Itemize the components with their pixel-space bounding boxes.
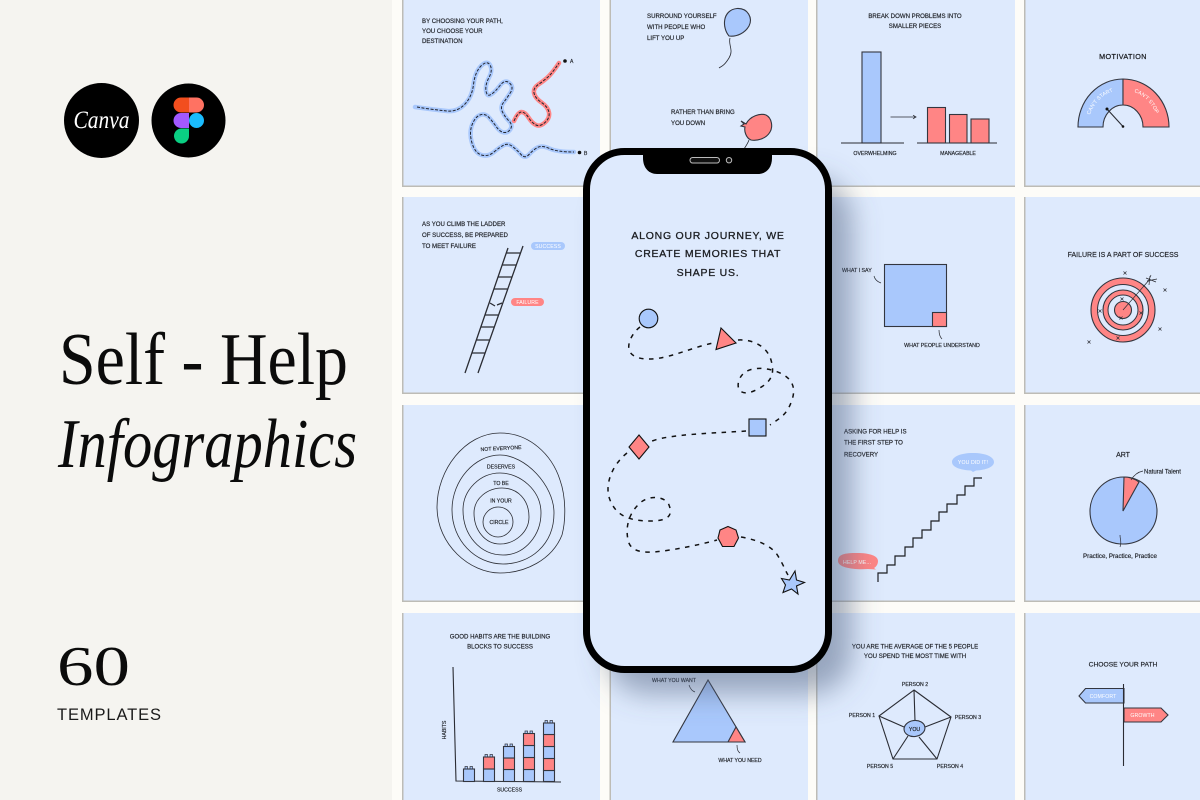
text: choose title: CHOOSE YOUR PATH xyxy=(1089,662,1158,668)
chart: winding path xyxy=(415,59,588,157)
chart: pie chart xyxy=(1090,471,1157,547)
icon: Figma badge xyxy=(152,84,226,158)
icon: circle marker xyxy=(639,309,658,328)
heading: phone title: ALONG OUR JOURNEY, WE xyxy=(631,230,785,242)
chart: pentagon network: PERSON 2 xyxy=(902,682,928,688)
chart: pentagon network: PERSON 3 xyxy=(955,715,981,721)
chart: target with arrow xyxy=(1088,272,1166,344)
panel: card what I say xyxy=(816,197,1015,394)
callout: help me bubble xyxy=(838,553,878,570)
heading: phone title: CREATE MEMORIES THAT xyxy=(635,248,781,260)
text: help caption: THE FIRST STEP TO xyxy=(844,440,903,446)
callout: you did it bubble: YOU DID IT! xyxy=(958,460,988,466)
text: path caption: YOU CHOOSE YOUR xyxy=(422,28,483,35)
heading: main title xyxy=(57,319,357,483)
text: templates label: TEMPLATES xyxy=(57,706,161,724)
chart: pentagon network: PERSON 1 xyxy=(849,713,875,719)
icon: square marker xyxy=(749,419,766,436)
chart: pentagon network: YOU xyxy=(909,727,920,733)
panel: card asking for help xyxy=(816,405,1015,602)
callout: failure pill xyxy=(511,298,544,306)
icon: star marker xyxy=(782,571,804,594)
chart: nested circles: TO BE xyxy=(493,481,509,487)
panel: phone mockup xyxy=(586,152,828,670)
panel: left title column xyxy=(0,0,392,800)
text: template count: 60 xyxy=(57,636,130,698)
text: what you want label: WHAT YOU WANT xyxy=(652,678,697,684)
chart: nested circles: NOT EVERYONE xyxy=(480,445,522,453)
icon: phone notch xyxy=(643,153,772,174)
panel: card failure target xyxy=(1024,197,1200,394)
panel: card average of five xyxy=(816,613,1015,800)
text: ladder caption: TO MEET FAILURE xyxy=(422,243,476,250)
chart: nested circles: DESERVES xyxy=(487,464,516,470)
chart: pentagon network: PERSON 4 xyxy=(937,764,963,770)
panel: card want vs need xyxy=(610,613,808,800)
text: break down title xyxy=(868,13,962,30)
chart: stacked blocks xyxy=(442,667,561,794)
heading: main title: Infographics xyxy=(57,406,357,483)
text: break down title: SMALLER PIECES xyxy=(889,23,941,30)
icon: heptagon marker xyxy=(718,526,738,546)
text: help caption: ASKING FOR HELP IS xyxy=(844,428,907,436)
heading: phone title xyxy=(631,230,785,279)
panel: card circle rings xyxy=(402,405,600,602)
text: ladder caption: AS YOU CLIMB THE LADDER xyxy=(422,221,506,228)
chart: triangle want vs need xyxy=(673,680,745,753)
chart: pentagon network: PERSON 5 xyxy=(867,764,893,770)
text: help caption xyxy=(844,428,907,458)
chart: pentagon network xyxy=(849,682,981,770)
chart: nested circles: IN YOUR xyxy=(490,498,512,504)
text: motivation title: MOTIVATION xyxy=(1099,52,1147,61)
text: balloon caption top xyxy=(647,13,717,42)
panel: card path xyxy=(402,0,600,187)
chart: bars overwhelming vs manageable: OVERWHELMING xyxy=(853,151,897,157)
icon: Canva badge: Canva xyxy=(74,107,130,134)
text: practice label: Practice, Practice, Practice xyxy=(1083,553,1158,560)
panel: card balloons xyxy=(610,0,808,187)
icon: signpost xyxy=(1079,684,1168,766)
panel: card good habits xyxy=(402,613,600,800)
chart: winding path: A xyxy=(570,59,574,65)
chart: stacked blocks: HABITS xyxy=(442,720,448,739)
callout: success pill xyxy=(531,242,565,250)
panel: card choose your path xyxy=(1024,613,1200,800)
text: balloon caption top: SURROUND YOURSELF xyxy=(647,13,717,20)
chart: winding path: B xyxy=(584,151,588,157)
icon: blue balloon xyxy=(719,8,750,68)
callout: help me bubble: HELP ME... xyxy=(843,560,871,566)
icon: signpost: COMFORT xyxy=(1090,694,1117,700)
icon: Canva badge xyxy=(64,83,139,158)
chart: nested circles xyxy=(437,433,565,573)
icon: ladder xyxy=(465,246,523,373)
text: balloon caption top: WITH PEOPLE WHO xyxy=(647,24,705,31)
panel: card motivation xyxy=(1024,0,1200,187)
icon: diamond marker xyxy=(629,435,649,459)
text: average title: YOU ARE THE AVERAGE OF THE 5 PEOPLE xyxy=(852,644,978,650)
text: what I say label: WHAT I SAY xyxy=(842,268,872,274)
icon: signpost: GROWTH xyxy=(1130,713,1155,719)
callout: success pill: SUCCESS xyxy=(535,244,561,250)
icon: red balloon xyxy=(741,114,772,149)
chart: nested circles: CIRCLE xyxy=(489,520,509,526)
text: average title: YOU SPEND THE MOST TIME WITH xyxy=(864,653,966,660)
text: balloon caption bottom: YOU DOWN xyxy=(671,120,705,127)
text: habits title: BLOCKS TO SUCCESS xyxy=(467,644,533,650)
text: habits title xyxy=(450,634,550,650)
text: path caption: BY CHOOSING YOUR PATH, xyxy=(422,18,503,25)
callout: you did it bubble xyxy=(952,453,994,472)
heading: main title: Self - Help xyxy=(59,319,348,401)
text: what people understand label: WHAT PEOPLE UNDERSTAND xyxy=(904,343,980,349)
text: balloon caption bottom: RATHER THAN BRING xyxy=(671,109,735,116)
text: help caption: RECOVERY xyxy=(844,452,878,458)
text: break down title: BREAK DOWN PROBLEMS INTO xyxy=(868,13,962,20)
chart: stacked blocks: SUCCESS xyxy=(497,788,523,794)
chart: bars overwhelming vs manageable xyxy=(841,52,997,157)
text: ladder caption xyxy=(422,221,508,250)
icon: stairs xyxy=(878,478,982,582)
text: average title xyxy=(852,644,978,660)
text: path caption xyxy=(422,18,503,45)
chart: bars overwhelming vs manageable: MANAGEABLE xyxy=(940,151,976,157)
heading: phone title: SHAPE US. xyxy=(677,267,739,279)
phone shadow xyxy=(606,178,852,694)
icon: triangle marker xyxy=(716,328,736,350)
text: ladder caption: OF SUCCESS, BE PREPARED xyxy=(422,232,508,239)
text: habits title: GOOD HABITS ARE THE BUILDING xyxy=(450,634,550,640)
chart: understanding square xyxy=(874,264,946,339)
panel: card ladder xyxy=(402,197,600,394)
text: what you need label: WHAT YOU NEED xyxy=(718,758,762,764)
chart: motivation gauge: CAN'T START xyxy=(1087,88,1112,114)
text: failure title: FAILURE IS A PART OF SUCCESS xyxy=(1068,252,1179,259)
panel: card art pie xyxy=(1024,405,1200,602)
text: balloon caption top: LIFT YOU UP xyxy=(647,35,684,42)
chart: motivation gauge xyxy=(1077,78,1170,128)
text: balloon caption bottom xyxy=(671,109,735,127)
chart: dashed journey path xyxy=(608,327,794,575)
text: path caption: DESTINATION xyxy=(422,38,463,45)
text: art title: ART xyxy=(1116,452,1131,459)
chart: motivation gauge: CAN'T STOP xyxy=(1134,89,1159,112)
text: natural talent label: Natural Talent xyxy=(1144,470,1181,476)
panel: card break down problems xyxy=(816,0,1015,187)
callout: failure pill: FAILURE xyxy=(516,300,539,306)
